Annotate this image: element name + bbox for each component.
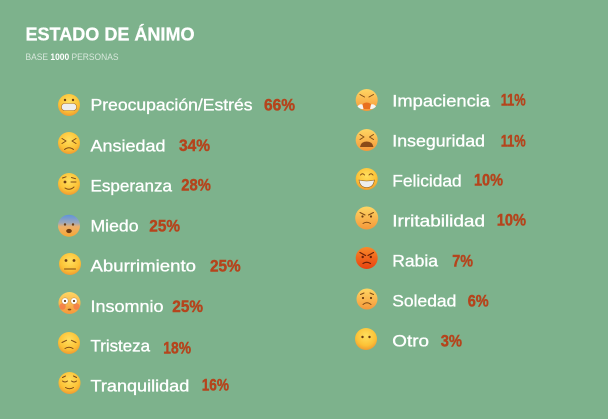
- row: Inseguridad: [356, 129, 526, 151]
- row: Impaciencia: 11%: [501, 91, 526, 110]
- row: Felicidad: [356, 168, 503, 191]
- row: Rabia: Rabia: [392, 252, 439, 271]
- left column: [58, 94, 295, 395]
- row: Felicidad: 10%: [474, 171, 503, 190]
- row: Inseguridad: Inseguridad: [392, 132, 485, 151]
- row: Tranquilidad: Tranquilidad: [90, 376, 189, 395]
- row: Soledad: Soledad: [392, 292, 456, 311]
- row: Insomnio: Insomnio: [90, 297, 164, 316]
- row: Insomnio: 25%: [172, 297, 203, 316]
- row: Esperanza: Esperanza: [90, 177, 173, 196]
- row: Irritabilidad: Irritabilidad: [392, 212, 485, 231]
- row: Tristeza: Tristeza: [90, 337, 151, 356]
- row: Ansiedad: Ansiedad: [90, 137, 166, 156]
- row: Aburrimiento: Aburrimiento: [90, 257, 196, 276]
- row: Rabia: [356, 247, 473, 271]
- row: Otro: Otro: [392, 332, 429, 351]
- title: ESTADO DE ÁNIMO: [26, 24, 194, 45]
- row: Insomnio: [58, 292, 203, 316]
- row: Ansiedad: 34%: [179, 136, 210, 155]
- row: Tristeza: [58, 332, 191, 358]
- row: Soledad: 6%: [468, 292, 489, 311]
- row: Aburrimiento: 25%: [210, 257, 241, 276]
- row: Tristeza: 18%: [163, 339, 191, 358]
- row: Miedo: Miedo: [90, 217, 138, 236]
- row: Miedo: 25%: [149, 217, 180, 236]
- row: Esperanza: [58, 173, 211, 196]
- right column: [355, 89, 526, 351]
- row: Tranquilidad: 16%: [202, 376, 229, 395]
- row: Soledad: [356, 288, 489, 311]
- row: Preocupación/Estrés: [58, 94, 295, 116]
- row: Esperanza: 28%: [181, 176, 211, 195]
- row: Irritabilidad: [355, 206, 526, 231]
- row: Impaciencia: Impaciencia: [392, 92, 491, 111]
- row: Preocupación/Estrés: Preocupación/Estrés: [90, 96, 252, 115]
- row: Tranquilidad: [58, 372, 229, 395]
- row: Aburrimiento: [59, 253, 241, 276]
- row: Felicidad: Felicidad: [392, 172, 462, 191]
- row: Otro: [355, 328, 462, 351]
- row: Impaciencia: [356, 89, 526, 111]
- row: Preocupación/Estrés: 66%: [264, 96, 295, 115]
- subtitle: BASE 1000 PERSONAS: [26, 52, 118, 62]
- row: Irritabilidad: 10%: [497, 211, 526, 230]
- row: Rabia: 7%: [452, 252, 473, 271]
- row: Ansiedad: [58, 132, 210, 156]
- row: Miedo: [58, 215, 180, 237]
- row: Otro: 3%: [441, 332, 462, 351]
- row: Inseguridad: 11%: [501, 132, 526, 151]
